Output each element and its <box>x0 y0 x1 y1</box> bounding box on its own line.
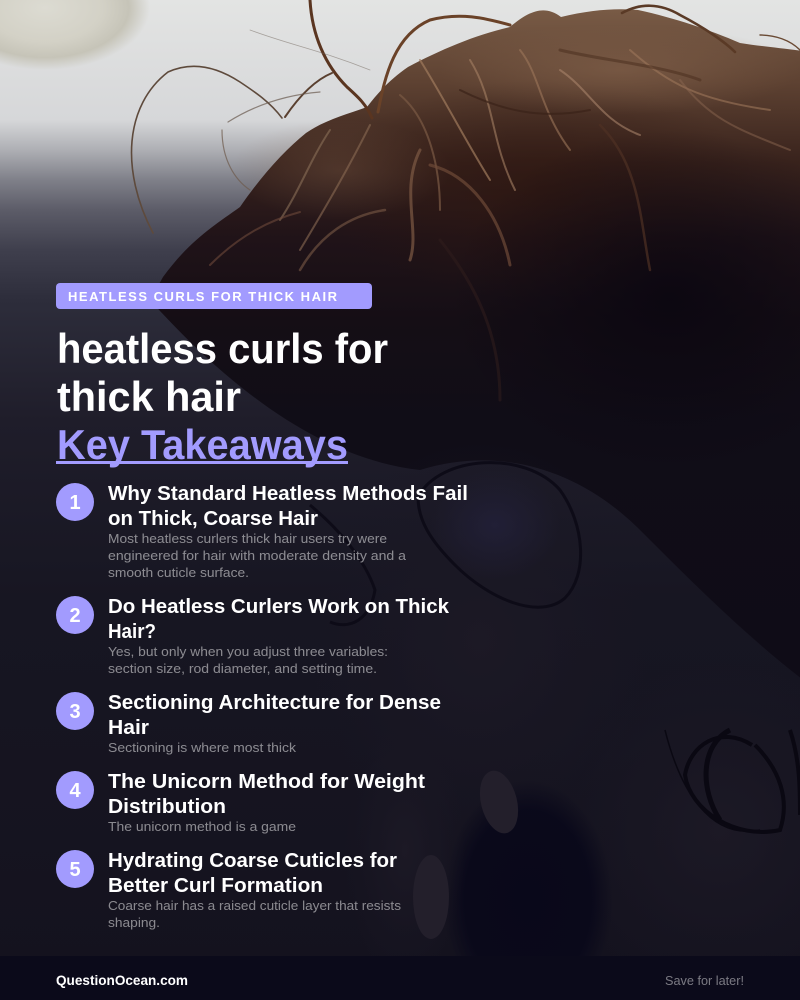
takeaway 1: Why Standard Heatless Methods Fail <box>108 483 468 505</box>
takeaway 5 <box>56 850 402 930</box>
title: Key Takeaways <box>57 421 348 468</box>
badge: HEATLESS CURLS FOR THICK HAIR <box>68 289 338 304</box>
takeaway 1: engineered for hair with moderate density and a <box>108 548 407 563</box>
takeaway 1: Most heatless curlers thick hair users try were <box>108 531 387 546</box>
takeaway 1 <box>56 483 468 580</box>
takeaway 2 <box>56 596 450 676</box>
takeaway 4: 4 <box>69 780 81 802</box>
takeaway 5: Hydrating Coarse Cuticles for <box>108 850 397 872</box>
takeaway 1: smooth cuticle surface. <box>108 565 249 580</box>
takeaway 5: shaping. <box>108 915 160 930</box>
takeaway 3: Sectioning is where most thick <box>108 740 297 755</box>
takeaway 4: The unicorn method is a game <box>108 819 296 834</box>
takeaway 1: on Thick, Coarse Hair <box>108 508 318 530</box>
takeaway 3: Sectioning Architecture for Dense <box>108 692 441 714</box>
neck curl <box>665 730 800 832</box>
takeaway 2: section size, rod diameter, and setting time. <box>108 661 377 676</box>
takeaway 5: 5 <box>69 859 81 881</box>
title: heatless curls for <box>57 325 388 372</box>
footer bar: QuestionOcean.com <box>56 972 188 988</box>
title <box>56 325 388 468</box>
title: thick hair <box>57 373 241 420</box>
takeaway 2: Do Heatless Curlers Work on Thick <box>108 596 450 618</box>
takeaway 4: The Unicorn Method for Weight <box>108 771 425 793</box>
takeaway 5: Coarse hair has a raised cuticle layer that resists <box>108 898 402 913</box>
takeaway 4: Distribution <box>108 796 226 818</box>
takeaway 3: Hair <box>108 717 149 739</box>
footer bar <box>0 956 800 1000</box>
takeaway 2: Yes, but only when you adjust three variables: <box>108 644 388 659</box>
hair strands <box>132 0 800 400</box>
nails <box>413 767 524 939</box>
takeaway 5: Better Curl Formation <box>108 875 323 897</box>
footer bar: Save for later! <box>665 973 744 988</box>
takeaway 1: 1 <box>69 492 81 514</box>
takeaway 3 <box>56 692 441 755</box>
takeaway 2: 2 <box>69 605 81 627</box>
face and hand <box>310 440 800 1000</box>
takeaway 2: Hair? <box>108 621 156 643</box>
glasses <box>310 463 581 625</box>
badge <box>56 283 372 309</box>
takeaway 4 <box>56 771 425 834</box>
takeaway 3: 3 <box>69 701 81 723</box>
